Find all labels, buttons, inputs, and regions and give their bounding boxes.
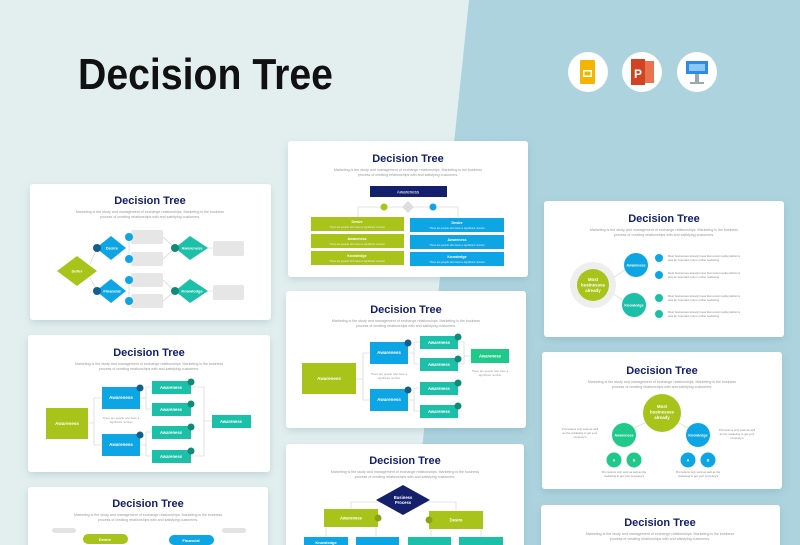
panel: card right 1 (circles): Knowledge	[624, 304, 644, 308]
panel: card right 2 (circle tree): company's	[730, 436, 744, 440]
panel: card mid 3 (business process): Knowledge	[315, 540, 337, 545]
panel: card left 3 (pills): process of creating relationships with and satisfying customers.	[98, 518, 198, 522]
panel: card left 2 (box tree)	[28, 335, 270, 472]
panel: card mid 2 (box tree): Awareness	[428, 362, 451, 367]
panel: card mid 1 (two columns): There are people who have a significant number	[329, 259, 385, 263]
panel: card left 2 (box tree): Awareness	[160, 430, 183, 435]
panel: card left 1 (diamond tree): Financial	[103, 288, 121, 294]
panel: card left 2 (box tree): Awareness	[160, 407, 183, 412]
panel: card left 2 (box tree): Marketing is the study and management of exchange relationships. Marketing is the business	[75, 362, 223, 366]
panel: card mid 1 (two columns): There are people who have a significant number	[329, 225, 385, 229]
panel: card left 2 (box tree): Awareness	[160, 454, 183, 459]
panel: card mid 2 (box tree): significant number	[378, 376, 400, 380]
panel: card mid 3 (business process): process of creating relationships with and satisfying customers.	[355, 475, 455, 479]
panel: card right 2 (circle tree): process of creating relationships with and satisfying customers.	[612, 385, 712, 389]
panel: card mid 1 (two columns): Knowledge	[347, 254, 367, 258]
panel: card right 2 (circle tree): Knowledge	[688, 434, 708, 438]
panel: card right 2 (circle tree): Promotions only work as well as the	[602, 470, 647, 474]
panel: card right 2 (circle tree): Most	[657, 404, 668, 409]
panel: card mid 3 (business process): Business	[394, 495, 413, 500]
panel: card mid 3 (business process): Process	[395, 500, 412, 505]
panel: card right 2 (circle tree): businesses	[650, 410, 675, 414]
panel: card mid 1 (two columns): Desire	[452, 221, 462, 225]
panel: card mid 1 (two columns): Awareness	[348, 237, 366, 241]
panel: card mid 1 (two columns): process of creating relationships with and satisfying customers.	[358, 173, 458, 177]
panel: card mid 2 (box tree): Awareness	[479, 354, 502, 358]
panel: card right 2 (circle tree): company's	[573, 435, 587, 439]
panel: card right 2 (circle tree): Awareness	[615, 434, 633, 438]
panel: card right 2 (circle tree): Decision Tree	[626, 365, 698, 377]
panel: card right 1 (circles): Decision Tree	[628, 213, 700, 225]
icons: app formats	[568, 52, 717, 92]
panel: card mid 1 (two columns)	[288, 141, 528, 277]
panel: card left 2 (box tree): Awareness	[109, 442, 133, 447]
panel: card left 1 (diamond tree)	[30, 184, 271, 320]
panel: card left 1 (diamond tree): Seller	[72, 268, 83, 274]
panel: card right 2 (circle tree): Promotions only work as well	[719, 428, 755, 432]
panel: card left 2 (box tree): Awareness	[109, 395, 133, 400]
panel: card mid 2 (box tree): Awareness	[428, 340, 451, 345]
panel: card left 3 (pills)	[28, 487, 268, 545]
panel: card mid 2 (box tree): Marketing is the study and management of exchange relationships. Marketing is the business	[332, 319, 480, 323]
panel: card mid 3 (business process): Marketing is the study and management of exchange relationships. Marketing is the business	[331, 470, 479, 474]
panel: card right 1 (circles): businesses	[581, 282, 606, 288]
panel: card left 2 (box tree): Awareness	[160, 385, 183, 390]
panel: card right 2 (circle tree): Marketing is the study and management of exchange relationships. Marketing is the business	[588, 380, 736, 384]
panel: card right 2 (circle tree): as the marketing to get your	[720, 432, 754, 436]
panel: card right 2 (circle tree): B	[707, 458, 710, 462]
panel: card mid 1 (two columns): There are people who have a significant number	[429, 243, 485, 247]
panel: card right 2 (circle tree)	[542, 352, 782, 489]
panel: card left 1 (diamond tree): Knowledge	[181, 288, 203, 294]
panel: card left 2 (box tree): Awareness	[55, 421, 79, 426]
panel: card left 3 (pills): Marketing is the study and management of exchange relationships. Marketing is the business	[74, 513, 222, 517]
panel: card mid 2 (box tree): There are people who have a	[371, 372, 408, 376]
panel: card left 1 (diamond tree): Desire	[106, 246, 119, 250]
panel: card left 2 (box tree): process of creating relationships with and satisfying customers.	[99, 367, 199, 371]
panel: card mid 3 (business process)	[286, 444, 524, 545]
panel: card right 2 (circle tree): as the marketing to get your	[563, 431, 597, 435]
panel: card mid 1 (two columns): There are people who have a significant number	[429, 260, 485, 264]
panel: card mid 2 (box tree): Awareness	[377, 350, 401, 355]
panel: card right 2 (circle tree): marketing to get your company's	[604, 474, 645, 478]
panel: card right 1 (circles): Most businesses already know that social media platforms	[668, 294, 741, 298]
panel: card right 3: Marketing is the study and management of exchange relationships. Marketing is the business	[586, 532, 734, 536]
panel: card left 2 (box tree): significant number	[110, 420, 132, 424]
panel: card right 2 (circle tree): Promotions only work as well as the	[676, 470, 721, 474]
panel: card mid 1 (two columns): Decision Tree	[372, 153, 444, 165]
panel: card left 3 (pills): Financial	[182, 538, 200, 543]
panel: card mid 1 (two columns): Marketing is the study and management of exchange relationships. Marketing is the business	[334, 168, 482, 172]
panel: card left 3 (pills): Decision Tree	[112, 498, 184, 510]
panel: card right 2 (circle tree): already	[654, 415, 670, 420]
panel: card mid 1 (two columns): Awareness	[397, 190, 420, 194]
panel: card mid 2 (box tree): Decision Tree	[370, 304, 442, 316]
panel: card mid 2 (box tree)	[286, 291, 526, 428]
panel: card right 1 (circles): play an important role in online marketing	[668, 275, 720, 279]
panel: card right 3: process of creating relationships with and satisfying customers.	[610, 537, 710, 541]
panel: card mid 3 (business process): Awareness	[340, 516, 363, 520]
panel: card right 2 (circle tree): marketing to get your company's	[678, 474, 719, 478]
panel: card right 1 (circles): Most businesses already know that social media platforms	[668, 310, 741, 314]
panel: card mid 2 (box tree): Awareness	[428, 386, 451, 391]
panel: card right 1 (circles): Awareness	[627, 264, 645, 268]
panel: card mid 1 (two columns): There are people who have a significant number	[429, 226, 485, 230]
panel: card right 2 (circle tree): A	[687, 458, 690, 462]
panel: card mid 2 (box tree): process of creating relationships with and satisfying customers.	[356, 324, 456, 328]
panel: card left 1 (diamond tree): Decision Tree	[114, 195, 186, 207]
panel: card mid 1 (two columns): Desire	[352, 220, 362, 224]
panel: card right 1 (circles)	[544, 201, 784, 337]
panel: card right 1 (circles): play an important role in online marketing	[668, 314, 720, 318]
panel: card right 1 (circles): Marketing is the study and management of exchange relationships. Marketing is the business	[590, 228, 738, 232]
panel: card right 2 (circle tree): B	[633, 458, 636, 462]
panel: card left 2 (box tree): There are people who have a	[103, 416, 140, 420]
main title: Decision Tree	[78, 50, 333, 99]
icon: google slides	[568, 52, 608, 92]
panel: card right 1 (circles): Most businesses already know that social media platforms	[668, 254, 741, 258]
panel: card right 1 (circles): Most	[588, 277, 599, 282]
panel: card mid 2 (box tree): There are people who have a	[472, 369, 509, 373]
panel: card right 1 (circles): Most businesses already know that social media platforms	[668, 271, 741, 275]
panel: card mid 3 (business process): Decision Tree	[369, 455, 441, 467]
panel: card left 3 (pills): Desire	[99, 537, 112, 542]
panel: card mid 3 (business process): Desire	[450, 518, 463, 522]
background: right blue diagonal	[412, 0, 800, 545]
panel: card mid 1 (two columns): Awareness	[448, 238, 466, 242]
panel: card right 3: Decision Tree	[624, 517, 696, 529]
panel: card mid 2 (box tree): Awareness	[317, 376, 341, 381]
panel: card right 2 (circle tree): Promotions only work as well	[562, 427, 598, 431]
panel: card right 1 (circles): play an important role in online marketing	[668, 258, 720, 262]
panel: card left 1 (diamond tree): Marketing is the study and management of exchange relationships. Marketing is the business	[76, 210, 224, 214]
panel: card right 1 (circles): play an important role in online marketing	[668, 298, 720, 302]
panel: card mid 2 (box tree): Awareness	[428, 409, 451, 414]
panel: card right 1 (circles): already	[585, 288, 601, 293]
icon: powerpoint	[622, 52, 662, 92]
panel: card right 1 (circles): process of creating relationships with and satisfying customers.	[614, 233, 714, 237]
panel: card left 2 (box tree): Decision Tree	[113, 347, 185, 359]
panel: card left 1 (diamond tree): process of creating relationships with and satisfying customers.	[100, 215, 200, 219]
panel: card right 2 (circle tree): A	[613, 458, 616, 462]
icon: powerpoint: P	[634, 67, 642, 81]
panel: card right 3	[541, 505, 780, 545]
icon: keynote	[677, 52, 717, 92]
panel: card mid 1 (two columns): There are people who have a significant number	[329, 242, 385, 246]
panel: card left 2 (box tree): Awareness	[220, 419, 243, 424]
panel: card mid 1 (two columns): Knowledge	[447, 255, 467, 259]
panel: card left 1 (diamond tree): Awareness	[181, 246, 203, 250]
panel: card mid 2 (box tree): Awareness	[377, 397, 401, 402]
panel: card mid 2 (box tree): significant number	[479, 373, 501, 377]
